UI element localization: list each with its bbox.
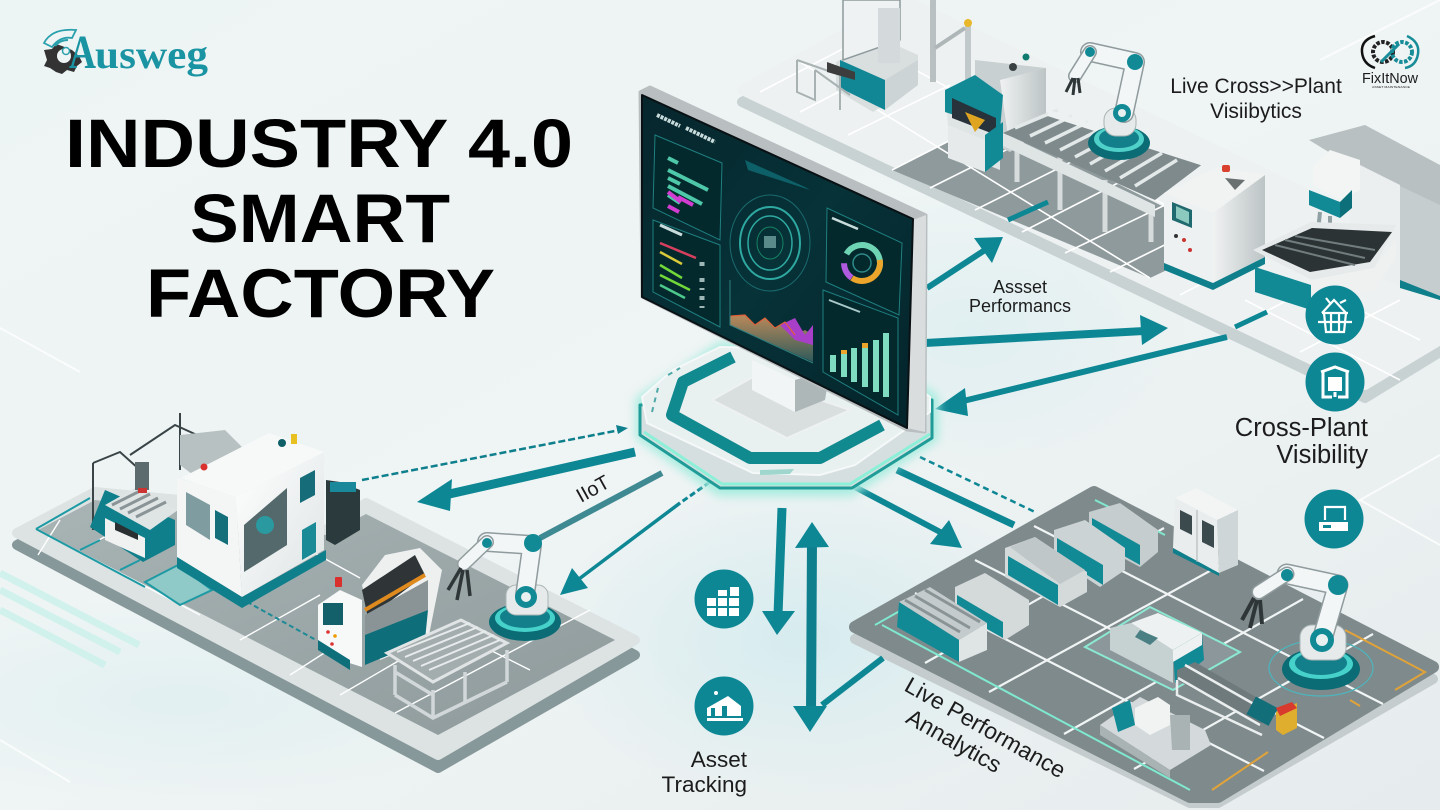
panel: donut chart	[826, 208, 902, 315]
platform: top-right factory floor	[742, 0, 1440, 398]
label: Asset Tracking: Asset	[691, 747, 747, 772]
monitor side highlight	[907, 215, 926, 432]
arrow: thick line to lower platform	[897, 470, 1014, 525]
platform: lower-right factory floor	[855, 492, 1433, 803]
icon: factory building	[694, 676, 754, 736]
machine: control cabinet top	[1164, 165, 1265, 290]
arrow: to top platform	[927, 237, 1003, 288]
logo wordmark: usweg	[95, 32, 208, 77]
arrow: from right platform to monitor	[935, 337, 1227, 416]
icon: gear loop	[1362, 36, 1418, 68]
machine: roller conveyor top	[1003, 110, 1204, 242]
machine row: teal modules	[897, 503, 1158, 662]
robot arm: left	[448, 534, 561, 641]
logo tagline: ASSET MAINTENANCE	[1372, 85, 1410, 89]
robot arm: top	[1066, 47, 1150, 160]
monitor bezel	[640, 87, 926, 432]
icon: gateway	[1306, 352, 1364, 412]
arrow: thin to left robot	[560, 477, 717, 595]
monitor base: octagonal hub	[636, 342, 938, 496]
label: Assset Performancs: Assset	[993, 277, 1047, 297]
arrow: thick to left platform	[417, 452, 635, 511]
arrow: double vertical	[793, 522, 829, 732]
arrow: to right middle	[925, 315, 1168, 345]
platform: left factory floor	[17, 492, 635, 768]
label: Live Performance Annalytics: Annalytics	[902, 704, 1006, 778]
logo: FixItNow	[1362, 36, 1418, 89]
label: Asset Tracking: Tracking	[662, 772, 747, 797]
logo initial: A	[69, 26, 96, 79]
arrow: line to lower platform	[822, 658, 883, 705]
arrow: dashed to lower platform	[920, 457, 1037, 513]
machine: centre unit	[1110, 613, 1204, 683]
machine: server cabinets	[1173, 488, 1238, 576]
label: Assset Performancs: Performancs	[969, 296, 1071, 316]
icon: gear with wifi arcs	[44, 30, 82, 74]
icon: stacked boxes	[694, 570, 754, 628]
label: Live Cross>>Plant Visiibytics: Visiibytics	[1210, 100, 1302, 123]
panel: lower-left list	[653, 220, 720, 327]
machine: large white enclosure	[177, 433, 360, 608]
machine: laser cutter	[1253, 125, 1440, 310]
machine: gantry cell top	[797, 0, 972, 112]
machine: lower utility skid	[1100, 697, 1211, 778]
title line 3: FACTORY	[146, 255, 495, 332]
arrow: to lower platform	[855, 487, 962, 548]
screen heading	[657, 115, 810, 190]
machine: cell beside conveyor	[945, 45, 1046, 172]
machine: left extruder	[90, 413, 245, 562]
robot arm: lower right	[1242, 569, 1373, 696]
monitor screen	[642, 95, 913, 428]
icon: smart basket	[1306, 286, 1364, 344]
title line 1: INDUSTRY 4.0	[65, 105, 573, 182]
arrow: line to left robot	[540, 473, 662, 538]
title line 2: SMART	[190, 180, 450, 257]
label: Live Cross>>Plant Visiibytics: Live Cross>>Plant	[1170, 75, 1342, 98]
label: Cross-Plant Visibility: Cross-Plant	[1235, 414, 1368, 442]
logo wordmark: FixItNow	[1362, 70, 1418, 87]
machine: lower conveyor and yellow box	[1177, 662, 1297, 735]
panel: bar chart	[823, 290, 898, 415]
radar gauge	[730, 195, 810, 291]
machine: roller press with control panel	[318, 548, 442, 670]
area chart	[730, 280, 813, 363]
panel: top-left bars	[653, 135, 722, 240]
label: Live Performance Annalytics: Live Performance	[901, 672, 1070, 783]
label: Cross-Plant Visibility: Visibility	[1276, 441, 1368, 469]
monitor stand	[712, 360, 850, 438]
machine: roller table	[387, 620, 507, 718]
icon: terminal	[1304, 490, 1364, 548]
arrow: dashed link to left machine	[362, 425, 628, 480]
logo: Ausweg	[44, 26, 208, 79]
label: IIoT: IIoT	[573, 471, 614, 507]
monitor	[640, 87, 926, 432]
arrow: down	[762, 508, 795, 635]
title	[65, 105, 573, 332]
